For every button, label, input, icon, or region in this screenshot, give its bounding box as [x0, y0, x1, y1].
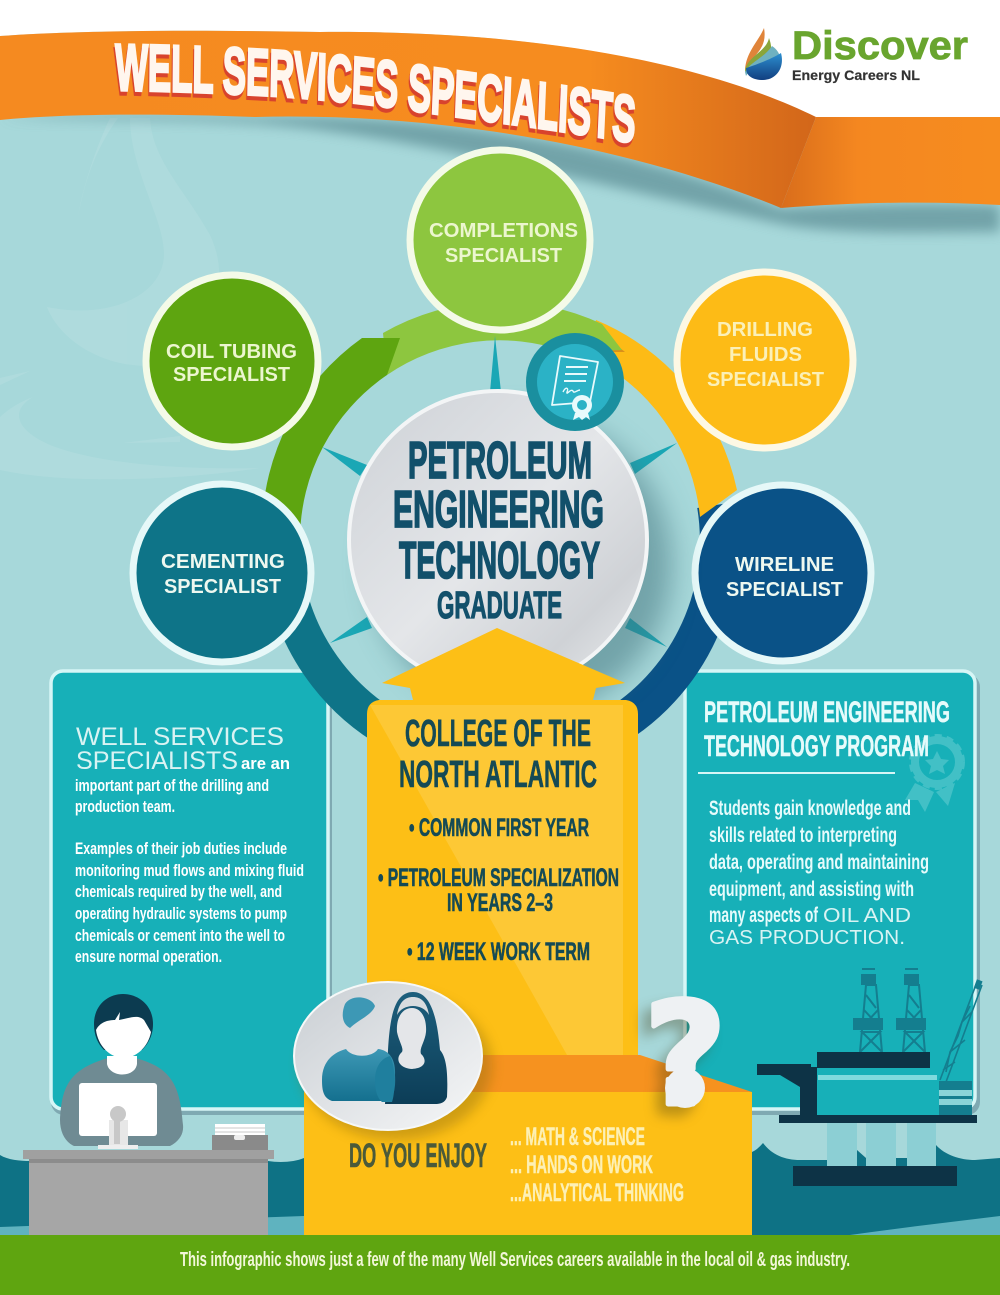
circle: cementing specialist: CEMENTING: [161, 551, 285, 573]
icon: flame drop: [745, 28, 782, 80]
yellow box: do you enjoy: ... MATH & SCIENCE: [510, 1123, 645, 1151]
text block: program panel: Students gain knowledge and: [709, 797, 911, 820]
circle: coil tubing specialist: COIL TUBING: [166, 341, 297, 363]
circle: coil tubing specialist: [146, 275, 318, 447]
spokes: [322, 336, 677, 647]
icon: man: [322, 997, 395, 1102]
yellow box: do you enjoy: ... HANDS ON WORK: [510, 1151, 653, 1179]
central circle shadow: [372, 415, 672, 715]
circle: wireline specialist: WIRELINE: [735, 554, 834, 576]
icon: people ellipse: [294, 982, 492, 1140]
text block: well services specialists intro: WELL SERVICES: [76, 723, 284, 751]
circle: drilling fluids specialist: FLUIDS: [729, 344, 802, 366]
yellow box: do you enjoy: ...ANALYTICAL THINKING: [510, 1179, 684, 1207]
circle: coil tubing specialist: SPECIALIST: [173, 364, 290, 386]
ring: light green segment: [383, 302, 622, 375]
icon: award watermark: [905, 736, 963, 812]
circle: drilling fluids specialist: [677, 272, 853, 448]
ocean waves right: [752, 1143, 1000, 1235]
text block: well services specialists intro: SPECIALISTS: [76, 747, 238, 775]
ocean shallow band left: [0, 1216, 304, 1235]
logo: discover energy careers nl: [745, 24, 968, 83]
text block: well services specialists intro: ensure normal operation.: [75, 947, 222, 966]
yellow box: do you enjoy: [304, 1092, 752, 1235]
logo: discover energy careers nl: Discover: [792, 24, 968, 68]
circle: wireline specialist: SPECIALIST: [726, 579, 843, 601]
panel: well services specialists: [51, 671, 332, 1115]
banner: left section: [0, 31, 816, 208]
rig: hull: [817, 1068, 939, 1116]
yellow arrow: college of the north atlantic: • PETROLEUM SPECIALIZATION: [378, 864, 619, 892]
circle: drilling fluids specialist: SPECIALIST: [707, 369, 824, 391]
circle: wireline specialist: [695, 485, 871, 661]
central circle: petroleum engineering technology graduate: GRADUATE: [437, 585, 562, 627]
text block: well services specialists intro: monitoring mud flows and mixing fluid: [75, 861, 304, 880]
icon: woman: [385, 992, 447, 1104]
circle: completions specialist: SPECIALIST: [445, 245, 562, 267]
text block: well services specialists intro: Examples of their job duties include: [75, 839, 287, 858]
ring: cementing segment: [287, 590, 400, 735]
orange ribbon: [304, 1055, 752, 1092]
logo: discover energy careers nl: Energy Careers NL: [792, 67, 920, 83]
icon: crane: [940, 979, 983, 1082]
person at desk: [23, 994, 274, 1235]
decorative swirls: [0, 118, 260, 479]
ocean shallow band right: [850, 1216, 1000, 1235]
circle: cementing specialist: SPECIALIST: [164, 576, 281, 598]
text block: program panel: GAS PRODUCTION.: [709, 927, 905, 949]
desk: [23, 1150, 274, 1235]
yellow box: do you enjoy: DO YOU ENJOY: [349, 1137, 487, 1175]
ring: dark green segment: [262, 338, 400, 540]
text block: well services specialists intro: are an: [241, 754, 290, 773]
text block: program panel: [698, 696, 963, 949]
ocean waves left: [0, 1155, 304, 1235]
progress ring: [262, 302, 737, 735]
yellow arrow: college of the north atlantic: IN YEARS 2–3: [447, 889, 553, 917]
text block: well services specialists intro: important part of the drilling and: [75, 776, 269, 795]
circle: completions specialist: [410, 150, 590, 330]
ring: arrow shadow: [598, 335, 625, 352]
rig: dark structure: [757, 1052, 977, 1123]
footer bar: [0, 1235, 1000, 1295]
text block: program panel: skills related to interpreting: [709, 824, 897, 847]
banner shadow: [0, 114, 1000, 233]
title: WELL SERVICES SPECIALISTS: [113, 43, 636, 148]
rig: pontoon: [793, 1166, 957, 1186]
yellow arrow: college of the north atlantic: • 12 WEEK WORK TERM: [407, 938, 590, 966]
icon: derricks: [853, 969, 926, 1052]
banner: right fold: [781, 117, 1000, 208]
text block: program panel: equipment, and assisting with: [709, 878, 914, 901]
icon: person: [60, 994, 183, 1146]
ring: yellow segment: [585, 320, 737, 517]
circle: drilling fluids specialist: DRILLING: [717, 319, 813, 341]
text block: well services specialists intro: production team.: [75, 797, 175, 816]
offshore rig: [757, 969, 983, 1186]
ring: wireline segment: [600, 505, 719, 735]
yellow arrow: college of the north atlantic: NORTH ATLANTIC: [399, 754, 597, 796]
yellow arrow: college of the north atlantic: • COMMON FIRST YEAR: [409, 814, 589, 842]
rig: crane house: [939, 1081, 972, 1116]
central circle: petroleum engineering technology graduate: [349, 391, 647, 689]
central circle: petroleum engineering technology graduate: PETROLEUM: [408, 432, 592, 490]
text block: program panel: many aspects of: [709, 904, 819, 927]
circle: cementing specialist: [133, 484, 311, 662]
text block: program panel: OIL AND: [823, 905, 911, 927]
panel: petroleum engineering technology program: [685, 671, 980, 1115]
white top area: [0, 0, 1000, 120]
yellow arrow: college of the north atlantic: [367, 628, 638, 1060]
icon: computer: [79, 1083, 157, 1149]
text block: well services specialists intro: [75, 723, 304, 966]
yellow arrow: college of the north atlantic: COLLEGE OF THE: [405, 713, 591, 755]
text block: well services specialists intro: chemicals required by the well, and: [75, 882, 282, 901]
text block: well services specialists intro: operating hydraulic systems to pump: [75, 904, 287, 923]
circle: completions specialist: COMPLETIONS: [429, 220, 578, 242]
text block: well services specialists intro: chemicals or cement into the well to: [75, 926, 285, 945]
icon: certificate badge: [526, 333, 624, 431]
icon: paper tray: [212, 1124, 268, 1150]
central circle: petroleum engineering technology graduate: ENGINEERING: [393, 481, 604, 539]
icon: question mark: ?: [644, 973, 726, 1138]
rig: legs: [827, 1120, 936, 1166]
central circle: petroleum engineering technology graduate: TECHNOLOGY: [399, 532, 600, 590]
